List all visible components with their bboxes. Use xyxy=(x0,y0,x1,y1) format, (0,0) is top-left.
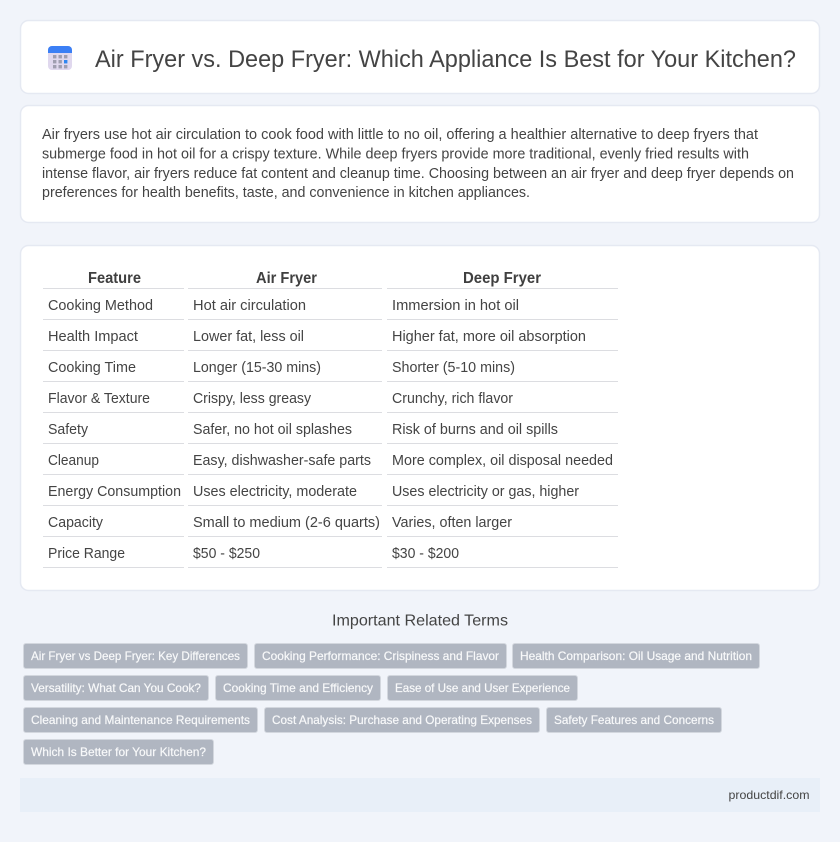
tag xyxy=(254,644,506,668)
heading: related terms: Important Related Terms xyxy=(332,612,508,630)
tag: Which Is Better for Your Kitchen? xyxy=(31,745,206,759)
text block: description: intense flavor, air fryers reduce fat content and cleanup time. Choosing between an air fryer and deep fryer depends on xyxy=(42,166,794,182)
row: cleanup: Easy, dishwasher-safe parts xyxy=(193,453,371,469)
tag: Cost Analysis: Purchase and Operating Expenses xyxy=(272,713,532,727)
panel: description xyxy=(20,106,820,222)
panel: header xyxy=(20,20,820,94)
tag: Cleaning and Maintenance Requirements xyxy=(31,713,250,727)
tag xyxy=(216,676,380,700)
tag xyxy=(388,676,578,700)
row: cooking method: Hot air circulation xyxy=(193,298,306,314)
tag: Air Fryer vs Deep Fryer: Key Differences xyxy=(31,649,240,663)
row: safety: Risk of burns and oil spills xyxy=(392,422,558,438)
tag xyxy=(24,740,214,764)
row: flavor and texture: Crunchy, rich flavor xyxy=(392,391,513,407)
row: energy consumption: Energy Consumption xyxy=(48,484,181,500)
tag xyxy=(546,708,722,732)
tag: Cooking Time and Efficiency xyxy=(223,681,373,695)
panel: related term tags xyxy=(24,644,760,764)
table header: Air Fryer xyxy=(256,270,317,287)
row: cooking method: Cooking Method xyxy=(48,298,153,314)
row: capacity: Small to medium (2-6 quarts) xyxy=(193,515,380,531)
row: cooking method xyxy=(48,298,519,314)
tag: Ease of Use and User Experience xyxy=(395,681,570,695)
row: health impact: Health Impact xyxy=(48,329,138,345)
row: capacity: Capacity xyxy=(48,515,104,531)
row: health impact xyxy=(48,329,586,345)
row: cooking time: Cooking Time xyxy=(48,360,136,376)
table header: Deep Fryer xyxy=(463,270,541,287)
tag xyxy=(24,676,208,700)
row: safety xyxy=(48,422,558,438)
icon: calendar xyxy=(48,46,72,70)
tag: Health Comparison: Oil Usage and Nutrition xyxy=(520,649,752,663)
text block: description: submerge food in hot oil for a crispy texture. While deep fryers provide more traditional, evenly fried results with xyxy=(42,146,749,162)
row: safety: Safety xyxy=(48,422,89,438)
row: energy consumption: Uses electricity, moderate xyxy=(193,484,357,500)
row: cleanup: More complex, oil disposal needed xyxy=(392,453,613,469)
row: health impact: Lower fat, less oil xyxy=(193,329,304,345)
row: cooking time: Longer (15-30 mins) xyxy=(193,360,321,376)
footer xyxy=(20,778,820,812)
row: capacity: Varies, often larger xyxy=(392,515,512,531)
title: Air Fryer vs. Deep Fryer: Which Appliance Is Best for Your Kitchen? xyxy=(95,46,796,73)
row: safety: Safer, no hot oil splashes xyxy=(193,422,352,438)
row: energy consumption: Uses electricity or gas, higher xyxy=(392,484,579,500)
table header xyxy=(88,270,541,287)
text block: description: preferences for health benefits, taste, and convenience in kitchen appliances. xyxy=(42,185,530,201)
text block: description: Air fryers use hot air circulation to cook food with little to no oil, offering a healthier alternative to deep fryers that xyxy=(42,127,758,143)
row: price range: $50 - $250 xyxy=(193,546,260,562)
text block: description xyxy=(42,127,794,201)
tag xyxy=(512,644,760,668)
row: flavor and texture: Flavor & Texture xyxy=(48,391,150,407)
row: health impact: Higher fat, more oil absorption xyxy=(392,329,586,345)
row: cleanup: Cleanup xyxy=(48,453,99,469)
tag: Versatility: What Can You Cook? xyxy=(31,681,201,695)
row: price range: Price Range xyxy=(48,546,125,562)
tag: Cooking Performance: Crispiness and Flavor xyxy=(262,649,499,663)
tag xyxy=(24,708,258,732)
table header: Feature xyxy=(88,270,141,287)
row: cooking time xyxy=(48,360,515,376)
row: cooking method: Immersion in hot oil xyxy=(392,298,519,314)
row: price range: $30 - $200 xyxy=(392,546,459,562)
row: energy consumption xyxy=(48,484,579,500)
tag: Safety Features and Concerns xyxy=(554,713,714,727)
panel: comparison table xyxy=(20,246,820,590)
row: flavor and texture: Crispy, less greasy xyxy=(193,391,312,407)
row: capacity xyxy=(48,515,512,531)
footer: productdif.com xyxy=(728,788,810,802)
tag xyxy=(264,708,540,732)
tag xyxy=(24,644,248,668)
row: flavor and texture xyxy=(48,391,513,407)
row: cooking time: Shorter (5-10 mins) xyxy=(392,360,515,376)
row: price range xyxy=(48,546,459,562)
row: cleanup xyxy=(48,453,613,469)
